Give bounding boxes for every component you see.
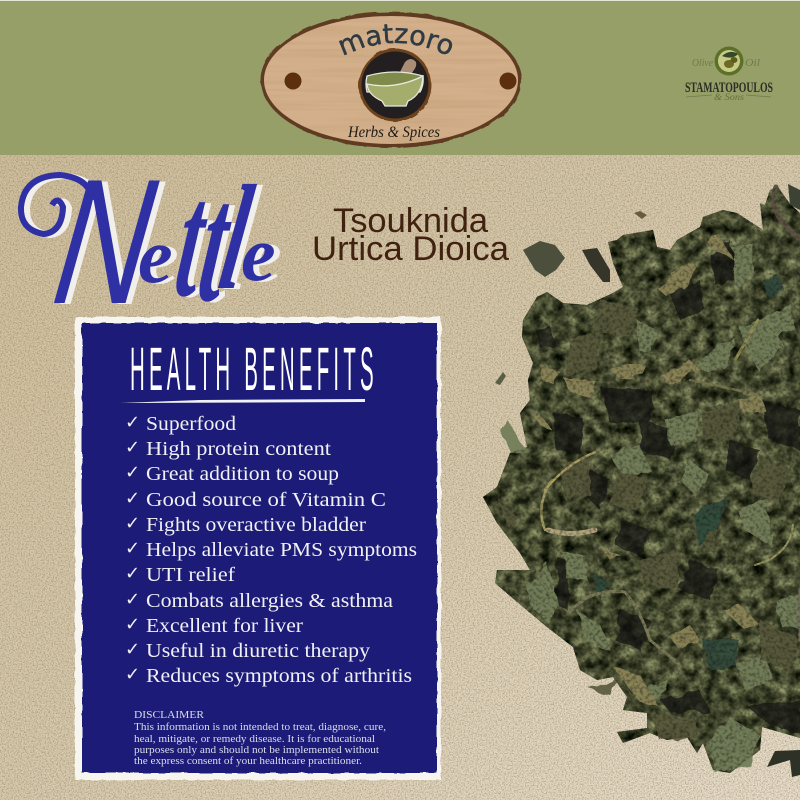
check marks: ✓ xyxy=(125,538,140,559)
benefit items: Helps alleviate PMS symptoms xyxy=(146,539,417,561)
benefit items: Good source of Vitamin C xyxy=(146,489,386,511)
benefit items: Great addition to soup xyxy=(146,463,339,485)
panel heading: HEALTH BENEFITS xyxy=(130,335,374,403)
title shadow: t xyxy=(173,150,224,332)
tan leaves xyxy=(530,235,765,708)
leaf shapes xyxy=(497,235,800,773)
olive mid leaves xyxy=(497,300,800,740)
header band xyxy=(0,0,800,155)
benefit items xyxy=(146,413,417,687)
benefit items: Fights overactive bladder xyxy=(146,514,366,536)
title: Nettle xyxy=(21,143,282,343)
olive oil label: Oil xyxy=(745,57,760,69)
heading underline xyxy=(120,399,365,403)
check marks: ✓ xyxy=(125,412,140,433)
check marks: ✓ xyxy=(125,437,140,458)
subtitle: common and Latin names: Tsouknida xyxy=(333,202,488,240)
badge holes xyxy=(284,72,516,90)
disclaimer: This information is not intended to treat, diagnose, cure, xyxy=(134,722,386,733)
panel background with torn edge xyxy=(75,317,441,780)
pale stems xyxy=(541,187,800,665)
pile base xyxy=(483,187,800,773)
check marks: ✓ xyxy=(125,614,140,635)
title shadow: l xyxy=(216,157,268,322)
check marks: ✓ xyxy=(125,664,140,685)
logo: Stamatopoulos olive oil xyxy=(685,46,773,103)
disclaimer: the express consent of your healthcare practitioner. xyxy=(134,756,362,767)
leaf grain xyxy=(483,187,800,773)
disclaimer: heal, mitigate, or remedy disease. It is for educational xyxy=(134,734,375,745)
olive emblem xyxy=(714,46,744,76)
brand name: matzoro xyxy=(338,24,452,56)
benefit items: Excellent for liver xyxy=(146,615,303,637)
benefit items: Superfood xyxy=(146,413,236,435)
disclaimer: purposes only and should not be implemented without xyxy=(134,745,379,756)
title lettering: N xyxy=(45,143,165,342)
tagline: Herbs & Spices xyxy=(347,124,440,141)
check marks: ✓ xyxy=(125,563,140,584)
logo: matzoro wooden oval xyxy=(260,12,522,148)
olive oil label xyxy=(692,57,760,69)
sage leaves xyxy=(500,243,800,773)
check marks xyxy=(125,412,140,685)
check marks: ✓ xyxy=(125,589,140,610)
title lettering: l xyxy=(210,156,262,321)
title lettering xyxy=(21,143,276,342)
check marks: ✓ xyxy=(125,462,140,483)
disclaimer: DISCLAIMER xyxy=(134,710,204,721)
title shadow: e xyxy=(247,211,282,298)
panel: health benefits xyxy=(75,317,441,780)
dark gaps xyxy=(535,240,800,733)
benefit items: High protein content xyxy=(146,438,331,460)
olive oil label: Olive xyxy=(692,57,713,69)
subtitle: common and Latin names xyxy=(312,202,509,268)
title shadow: N xyxy=(51,144,171,343)
photo: dried nettle leaves pile xyxy=(483,184,800,777)
benefits list xyxy=(125,412,417,687)
title shadow: t xyxy=(196,150,248,339)
benefit items: Useful in diuretic therapy xyxy=(146,640,370,662)
benefit items: UTI relief xyxy=(146,564,235,586)
title lettering: e xyxy=(138,212,173,299)
green leaves xyxy=(590,276,785,670)
title shadow: e xyxy=(144,213,179,300)
title lettering: t xyxy=(190,149,242,338)
pile mottled texture xyxy=(483,187,800,773)
title shadow xyxy=(27,144,282,343)
title lettering: e xyxy=(241,210,276,297)
check marks: ✓ xyxy=(125,513,140,534)
and sons: & Sons xyxy=(714,93,744,103)
benefit items: Combats allergies & asthma xyxy=(146,590,393,612)
check marks: ✓ xyxy=(125,639,140,660)
wooden oval badge xyxy=(260,12,522,148)
disclaimer xyxy=(134,710,386,767)
mortar and pestle icon xyxy=(358,48,432,122)
check marks: ✓ xyxy=(125,488,140,509)
detached leaf pieces xyxy=(495,184,800,777)
title lettering: t xyxy=(167,149,218,331)
subtitle: common and Latin names: Urtica Dioica xyxy=(312,230,509,268)
benefit items: Reduces symptoms of arthritis xyxy=(146,665,412,687)
